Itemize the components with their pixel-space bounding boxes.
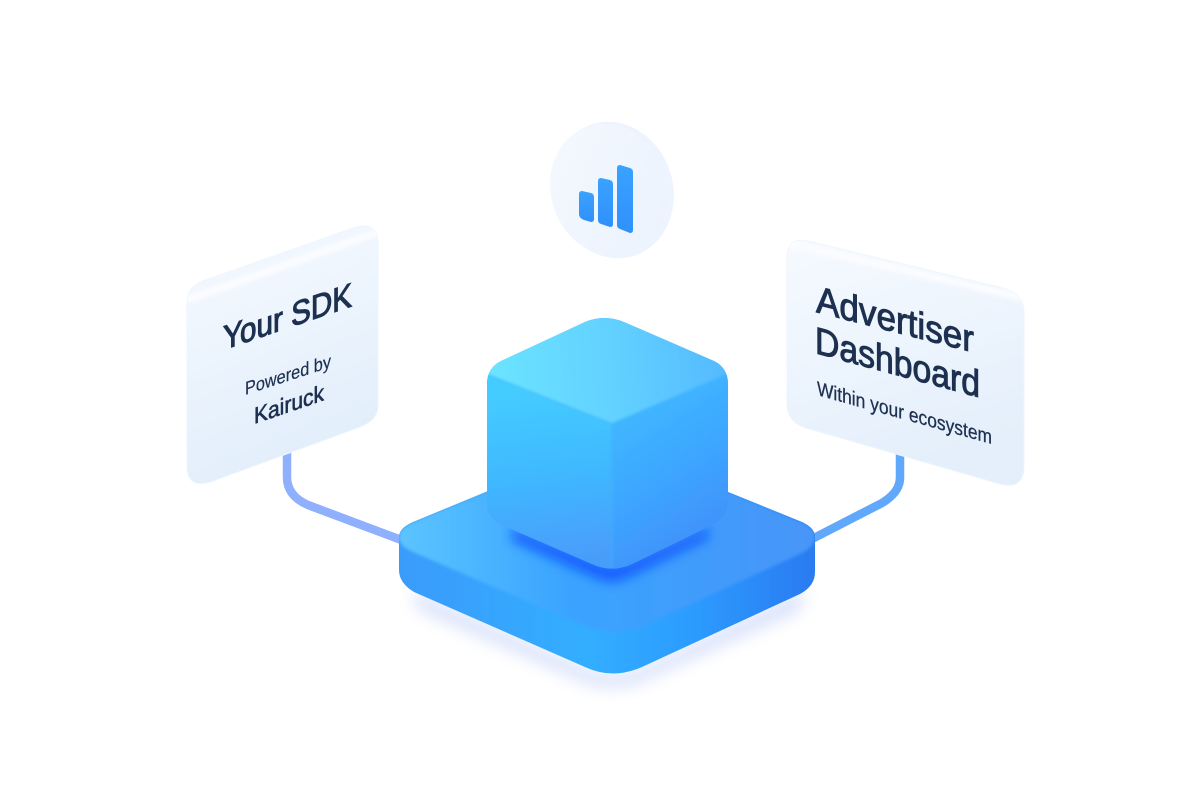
platform	[399, 492, 815, 693]
illustration	[186, 122, 1024, 693]
text: Within your ecosystem: Within your ecosystem	[817, 378, 992, 449]
icon: bar chart disc	[533, 106, 691, 274]
heading: Advertiser: Advertiser	[816, 279, 974, 361]
connector: SDK card to platform	[287, 452, 404, 541]
connector: dashboard card to platform	[810, 452, 900, 540]
cube contact shadow	[512, 528, 708, 581]
heading: Dashboard: Dashboard	[815, 320, 980, 406]
panel: Advertiser Dashboard card	[787, 240, 1024, 485]
panel: Your SDK card	[187, 226, 378, 483]
text: Powered by: Powered by	[245, 351, 331, 400]
central cube	[487, 318, 728, 568]
text: Kairuck: Kairuck	[254, 381, 324, 430]
heading: Your SDK: Your SDK	[223, 276, 352, 358]
